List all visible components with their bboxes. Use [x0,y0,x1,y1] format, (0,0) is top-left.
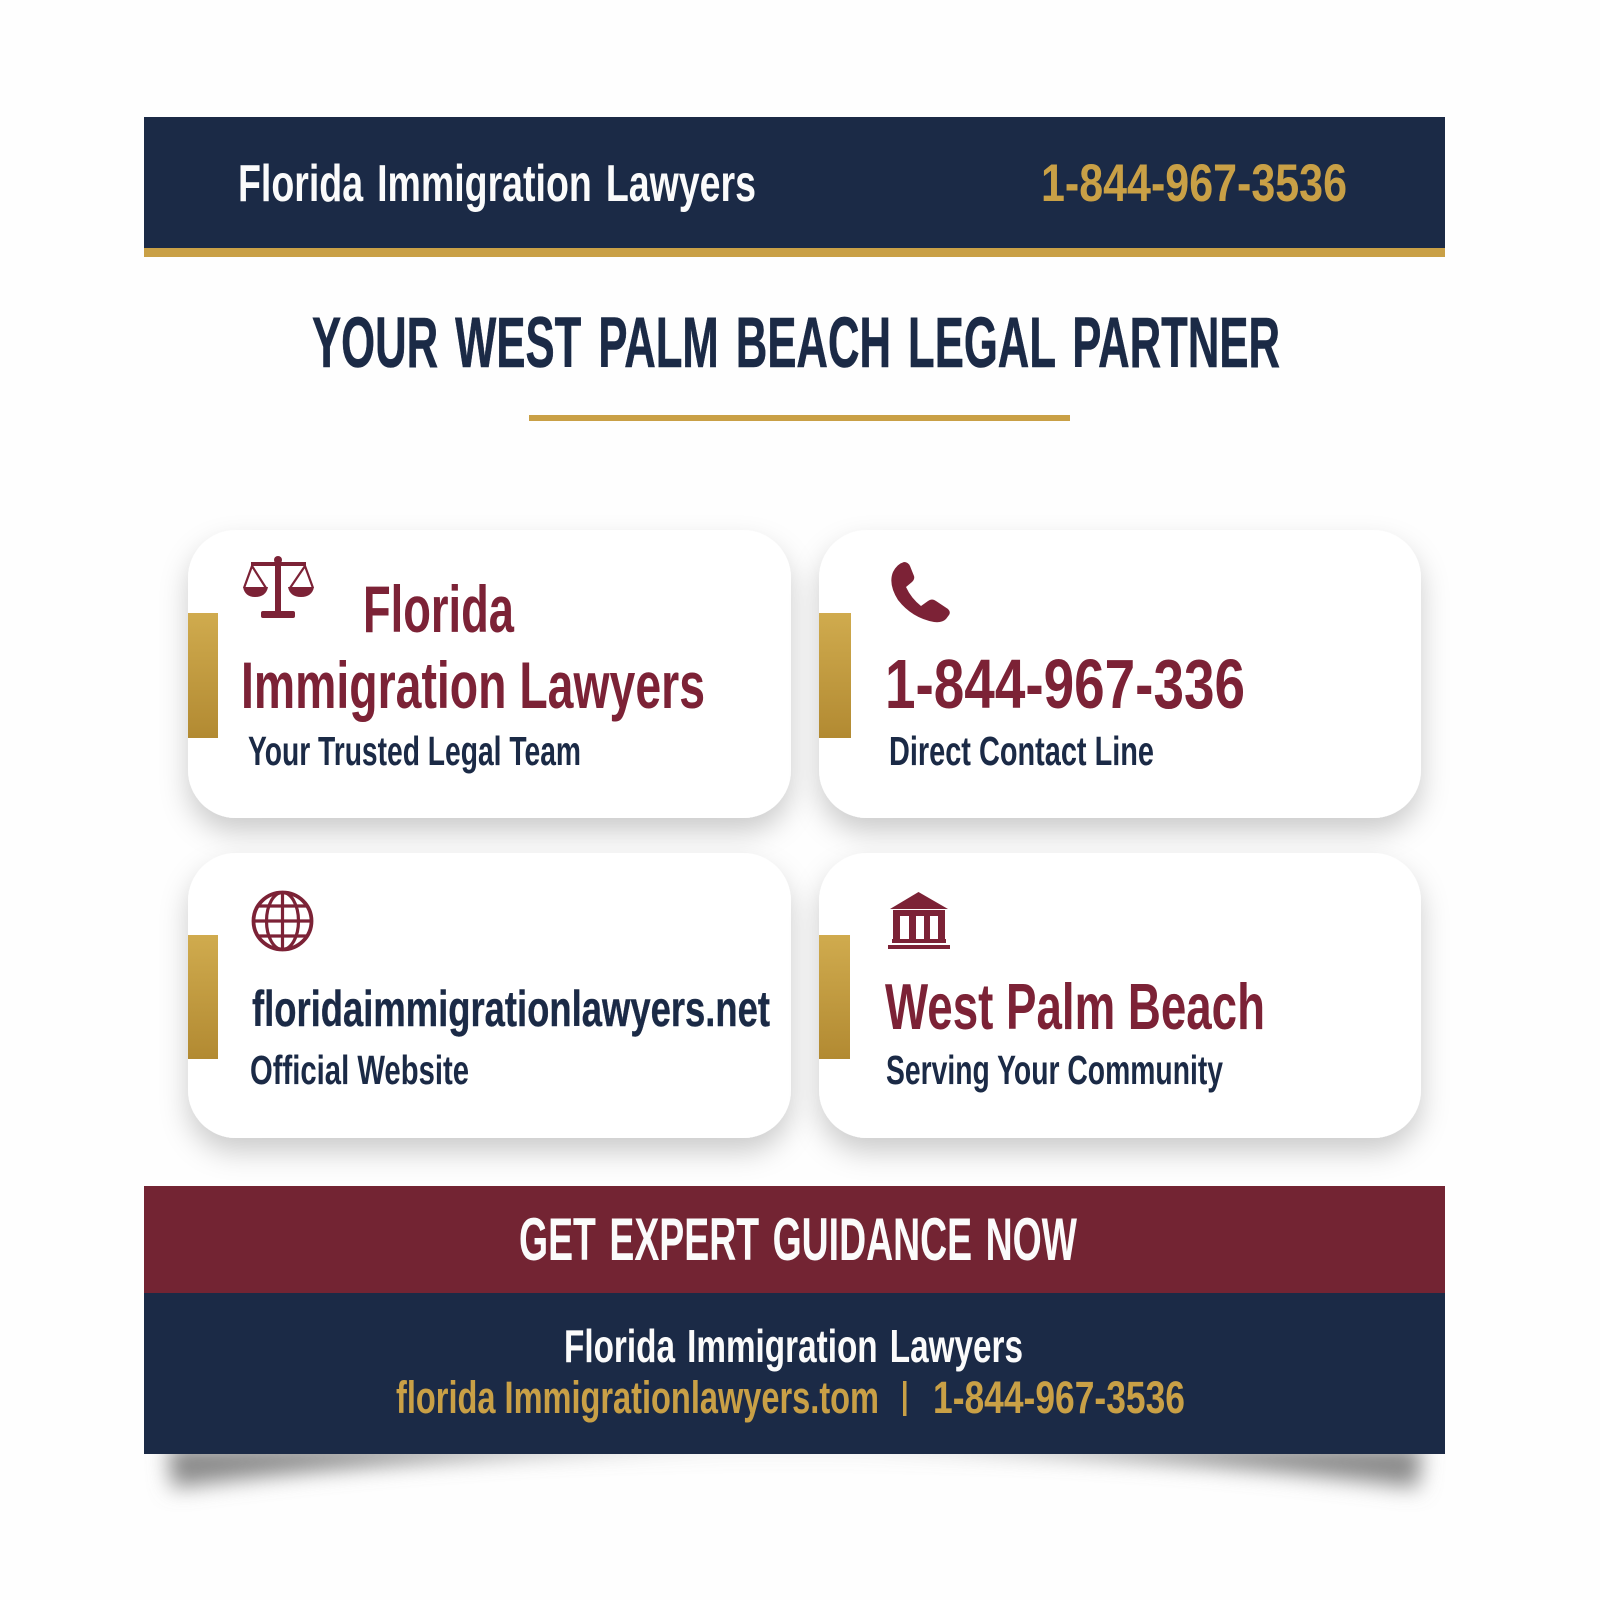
call to action text: GET EXPERT GUIDANCE NOW [519,1206,1077,1273]
footer phone: 1-844-967-3536 [933,1372,1185,1423]
card subtext: Serving Your Community [886,1047,1223,1093]
footer band [144,1293,1445,1454]
location heading: West Palm Beach [885,970,1265,1043]
card heading line 1: Florida [363,572,515,646]
icon: globe [254,892,312,950]
card: location [819,853,1421,1138]
header phone number: 1-844-967-3536 [1041,154,1347,213]
call to action band [144,1186,1445,1294]
icon: courthouse [888,892,950,949]
card: phone [819,530,1421,818]
card subtext: Direct Contact Line [889,728,1154,774]
header banner [144,117,1445,257]
card heading line 2: Immigration Lawyers [241,648,705,722]
card: website [188,853,791,1138]
footer firm name: Florida Immigration Lawyers [564,1320,1023,1372]
icon: telephone [891,562,950,622]
card: firm name [188,530,791,818]
card subtext: Your Trusted Legal Team [248,728,581,774]
website address: floridaimmigrationlawyers.net [252,981,770,1037]
footer website: florida Immigrationlawyers.tom [396,1372,879,1423]
card subtext: Official Website [250,1047,469,1093]
header firm name: Florida Immigration Lawyers [238,155,756,213]
icon: scales of justice [243,556,314,618]
phone number: 1-844-967-336 [885,645,1245,723]
